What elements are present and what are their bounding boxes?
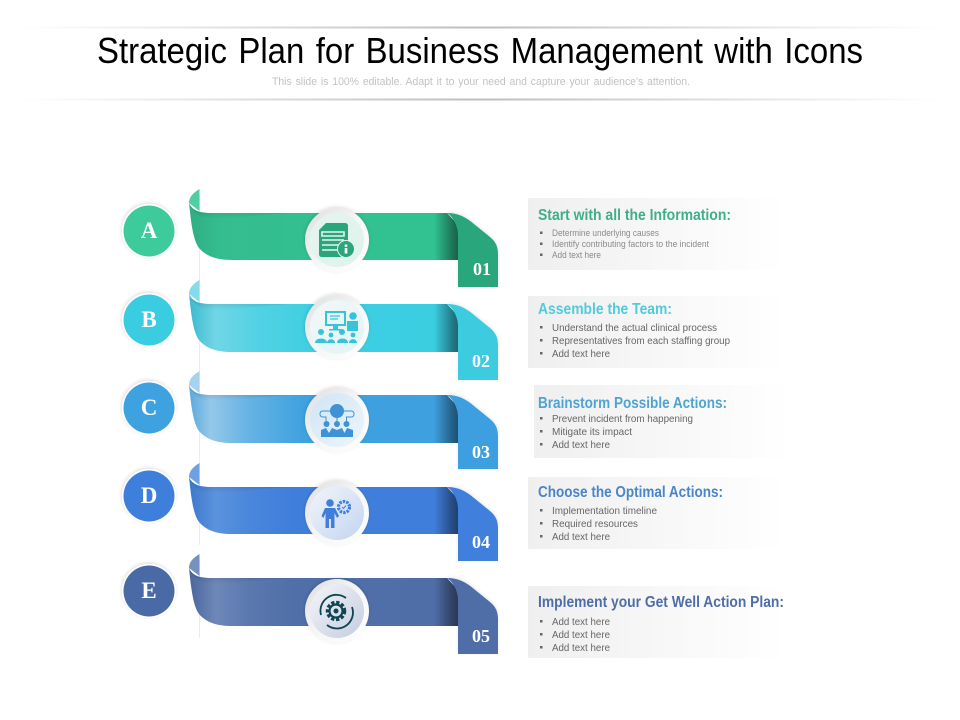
panel E: action plan (528, 586, 785, 658)
number 04: 04 (472, 532, 490, 552)
letter badge B (122, 293, 176, 347)
panel C: brainstorm: Brainstorm Possible Actions: (538, 395, 727, 412)
icon: person with gear (322, 499, 350, 528)
title: Strategic Plan for Business Management with Icons (97, 30, 863, 71)
icon: gear cycle (320, 595, 353, 628)
icon: document with info (319, 223, 354, 258)
panel C: brainstorm: Prevent incident from happening (552, 413, 693, 425)
panel B: team: Representatives from each staffing group (552, 335, 730, 347)
icon: gear over team (320, 404, 354, 437)
panel A: information (528, 198, 785, 270)
letter badge A (122, 204, 176, 258)
number 02: 02 (472, 351, 490, 371)
panel C: brainstorm (534, 385, 791, 458)
panel A: information: Add text here (552, 250, 601, 260)
panel A: information: Start with all the Information: (538, 207, 731, 224)
row D: ribbon (189, 463, 498, 561)
panel E: action plan: Add text here (552, 642, 610, 654)
medallion E with gear cycle icon (305, 579, 369, 643)
letter badge C (122, 381, 176, 435)
panel A: information: Determine underlying causes (552, 228, 659, 238)
panel B: team: Add text here (552, 348, 610, 360)
panel D: optimal actions: Required resources (552, 518, 638, 530)
bottom rule (20, 98, 940, 100)
number 01: 01 (473, 259, 491, 279)
panel B: team (528, 296, 785, 368)
panel C: brainstorm: Add text here (552, 439, 610, 451)
panel B: team: Understand the actual clinical process (552, 322, 717, 334)
medallion D with person gear icon (305, 481, 369, 545)
medallion C with team gear icon (305, 388, 369, 452)
panel D: optimal actions: Implementation timeline (552, 505, 657, 517)
icon: team presentation (315, 311, 358, 343)
letter badge A: A (141, 218, 158, 243)
letter badge E (122, 564, 176, 618)
panel D: optimal actions: Add text here (552, 531, 610, 543)
top rule (20, 26, 940, 28)
subtitle: This slide is 100% editable. Adapt it to your need and capture your audience's attention. (272, 76, 690, 88)
row E: ribbon (189, 554, 498, 654)
panel E: action plan: Add text here (552, 629, 610, 641)
letter badge D: D (141, 483, 157, 508)
row B: ribbon (189, 280, 498, 380)
row A: ribbon (189, 189, 498, 290)
medallion A with document info icon (305, 208, 369, 272)
number 05: 05 (472, 626, 490, 646)
panel C: brainstorm: Mitigate its impact (552, 426, 632, 438)
letter badge E: E (141, 578, 157, 603)
letter badge D (122, 469, 176, 523)
number 03: 03 (472, 442, 490, 462)
panel D: optimal actions (528, 477, 785, 549)
panel E: action plan: Implement your Get Well Action Plan: (538, 594, 784, 611)
medallion B with presentation icon (305, 295, 369, 359)
panel B: team: Assemble the Team: (538, 301, 672, 318)
panel E: action plan: Add text here (552, 616, 610, 628)
panel A: information: Identify contributing factors to the incident (552, 239, 709, 249)
panel D: optimal actions: Choose the Optimal Actions: (538, 484, 723, 501)
letter badge C: C (141, 395, 157, 420)
letter badge B: B (141, 307, 157, 332)
row C: ribbon (189, 371, 498, 470)
